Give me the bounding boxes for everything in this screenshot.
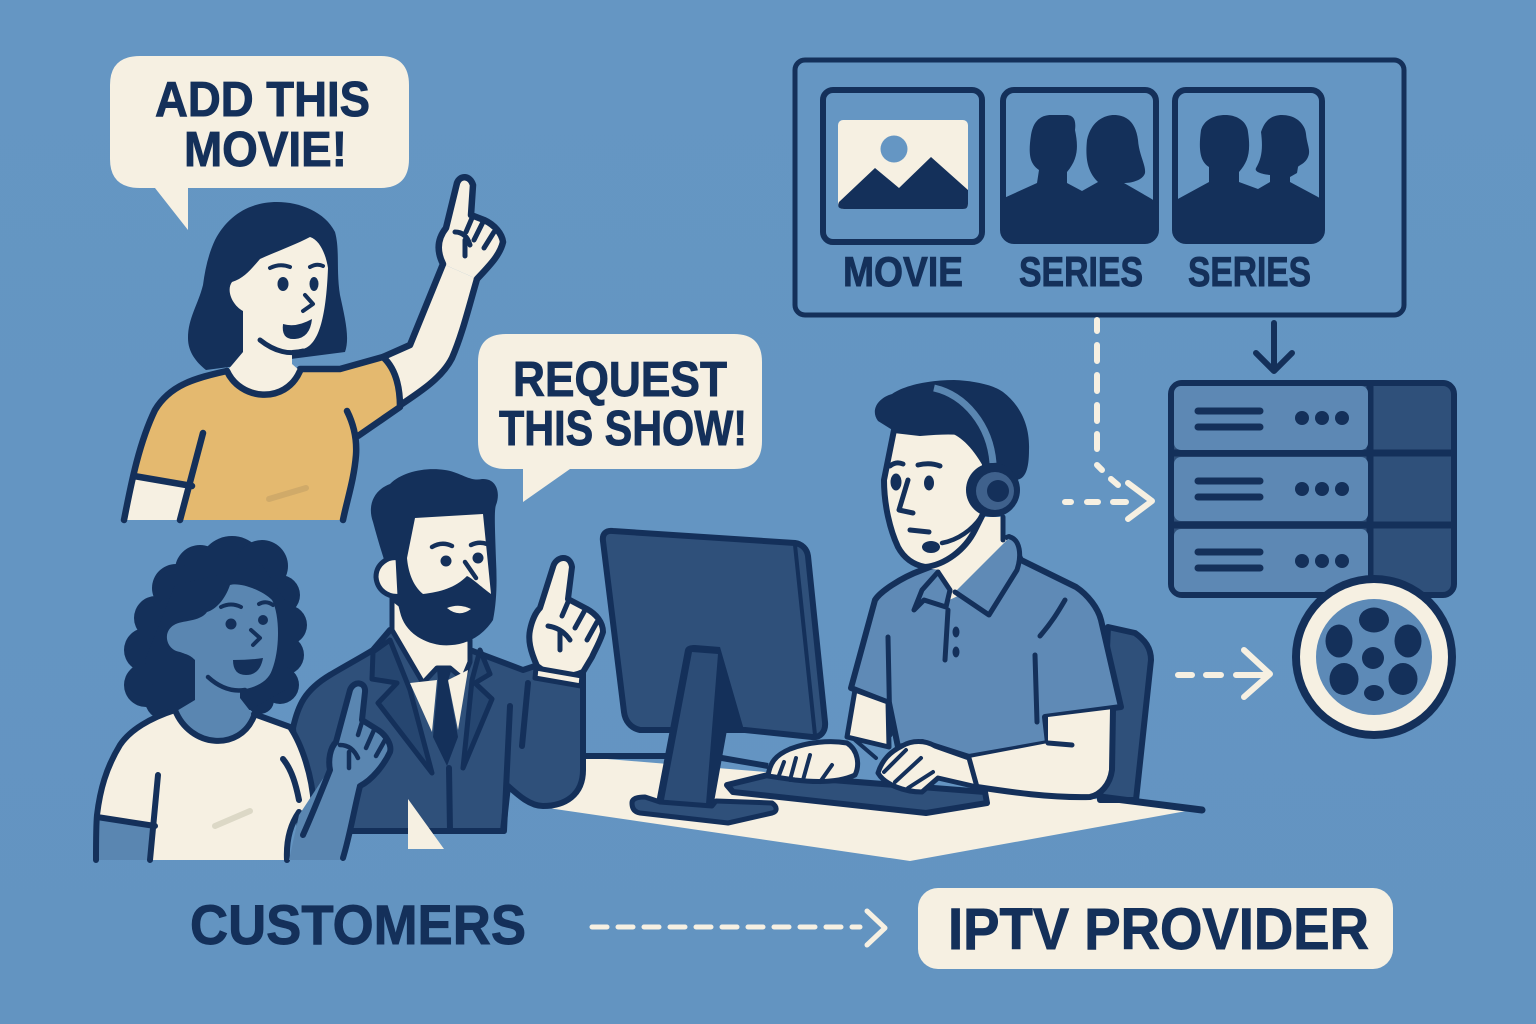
- desk: [548, 757, 1203, 861]
- arm: [383, 264, 477, 408]
- speech bubble: request this show: THIS SHOW!: [499, 402, 747, 456]
- series tile two: SERIES: [1188, 248, 1311, 295]
- jacket notch: [408, 799, 444, 849]
- lapels: [372, 640, 492, 773]
- curly hair: [124, 536, 307, 720]
- illustration: computer monitor: [603, 531, 825, 823]
- arrow: customers to provider: [592, 911, 885, 945]
- face: [884, 430, 985, 567]
- illustration: chair: [1100, 627, 1151, 800]
- neck and face: [227, 237, 328, 392]
- desk edge: [1100, 797, 1202, 810]
- tie: [433, 668, 458, 766]
- stand base: [632, 797, 776, 823]
- stand: [656, 645, 744, 808]
- mic boom: [942, 517, 981, 543]
- pointing hand: [329, 683, 390, 786]
- arrow: dashed to film reel: [1178, 650, 1270, 697]
- ear: [376, 558, 400, 596]
- illustration: woman in yellow shirt pointing up: [124, 177, 503, 520]
- lower-left arm: [96, 818, 155, 860]
- facial features: [890, 474, 902, 490]
- panel: content catalogue: [795, 60, 1404, 315]
- keyboard: [727, 775, 987, 813]
- shirt cuff: [535, 668, 582, 686]
- hand: [439, 177, 503, 279]
- illustration: support agent with headset: [727, 380, 1202, 813]
- heading: customers: CUSTOMERS: [190, 893, 526, 956]
- left forearm: [124, 476, 192, 520]
- arrow: dashed path from catalogue to servers: [1065, 320, 1152, 519]
- screen: [603, 531, 825, 737]
- neck: [918, 517, 1012, 602]
- face: [407, 514, 491, 594]
- polo shirt: [851, 537, 1121, 757]
- icon: film reel: [1292, 575, 1456, 739]
- illustration: man in suit: [293, 469, 603, 849]
- raised hand: [529, 558, 603, 676]
- suit: [293, 630, 583, 831]
- pointing arm: [289, 768, 360, 860]
- speech bubble: add this movie: [110, 56, 409, 230]
- head and beard: [371, 469, 498, 645]
- series tile two: [1173, 90, 1324, 295]
- illustration: woman with curly hair: [96, 536, 390, 860]
- hair: [875, 380, 1029, 480]
- collar: [914, 537, 1020, 615]
- facial features: [226, 618, 236, 630]
- icon: server stack: [1171, 383, 1454, 595]
- speech bubble: add this movie: MOVIE!: [184, 123, 347, 177]
- movie tile: [823, 90, 982, 295]
- facial features: [278, 277, 288, 291]
- right hand: [878, 742, 977, 792]
- hair: [188, 202, 347, 370]
- left hand: [768, 742, 858, 782]
- speech bubble: request this show: REQUEST: [513, 353, 727, 407]
- series tile one: SERIES: [1019, 248, 1143, 295]
- arms: [847, 690, 889, 747]
- blue neck and face: [167, 584, 278, 741]
- yellow shirt: [134, 357, 400, 520]
- speech bubble: add this movie: ADD THIS: [155, 73, 370, 127]
- label: iptv provider: IPTV PROVIDER: [948, 897, 1369, 962]
- shirt and collar: [392, 598, 470, 683]
- speech bubble: request this show: [478, 334, 762, 502]
- series tile one: [1001, 90, 1158, 295]
- facial features: [447, 606, 471, 613]
- headband: [934, 388, 993, 463]
- white shirt: [97, 710, 314, 860]
- headset earpiece: [966, 463, 1020, 517]
- movie tile: MOVIE: [843, 248, 963, 295]
- arrow: catalogue down to servers: [1256, 323, 1292, 371]
